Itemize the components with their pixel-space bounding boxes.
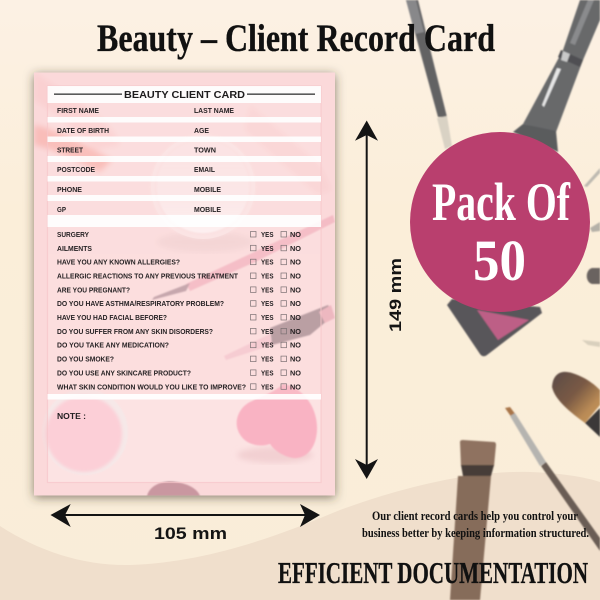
card photo: heart <box>237 384 317 463</box>
thin brush bottom <box>505 407 600 551</box>
yes and no labels: NO <box>290 313 301 322</box>
height label: 149 mm <box>386 258 405 332</box>
silver tools right <box>582 168 600 347</box>
personal details fields: MOBILE <box>194 185 221 194</box>
yes and no labels: NO <box>290 272 301 280</box>
yes and no labels: YES <box>261 230 274 239</box>
pack of 50 badge <box>410 132 590 312</box>
width arrow <box>50 504 320 527</box>
flat brush <box>450 440 496 600</box>
health questions <box>57 230 246 391</box>
personal details fields: DATE OF BIRTH <box>57 126 109 135</box>
card heading: BEAUTY CLIENT CARD <box>124 89 245 101</box>
personal details fields: TOWN <box>194 146 216 155</box>
card <box>34 72 335 496</box>
health questions: WHAT SKIN CONDITION WOULD YOU LIKE TO IMPROVE? <box>57 382 246 391</box>
compact <box>447 299 542 356</box>
note label: NOTE : <box>57 412 86 421</box>
thin brush top <box>406 0 452 149</box>
yes and no labels: YES <box>261 272 274 280</box>
health questions: HAVE YOU HAD FACIAL BEFORE? <box>57 313 167 322</box>
health questions: DO YOU SMOKE? <box>57 355 114 364</box>
yes and no labels: NO <box>290 382 301 391</box>
yes and no labels: YES <box>261 258 274 267</box>
health questions: ALLERGIC REACTIONS TO ANY PREVIOUS TREATMENT <box>57 272 238 280</box>
personal details fields: GP <box>57 205 66 214</box>
height arrow <box>355 120 378 479</box>
personal details fields: AGE <box>194 126 209 135</box>
yes and no labels: YES <box>261 327 274 336</box>
yes and no labels: YES <box>261 368 274 377</box>
yes and no labels: NO <box>290 341 301 350</box>
blush brush <box>552 372 600 437</box>
checkboxes <box>250 232 286 389</box>
bottom wave <box>0 472 600 600</box>
personal details fields: EMAIL <box>194 165 215 174</box>
card photo: pink brush <box>152 215 335 360</box>
yes and no labels: YES <box>261 313 274 322</box>
personal details fields: LAST NAME <box>194 106 234 115</box>
health questions: AILMENTS <box>57 244 92 253</box>
yes and no labels: YES <box>261 382 274 391</box>
personal details fields: STREET <box>57 146 83 155</box>
yes and no labels: YES <box>261 341 274 350</box>
card photo: glass dish <box>158 176 248 247</box>
large black brush <box>513 0 600 152</box>
yes and no labels: NO <box>290 258 301 267</box>
personal details fields <box>57 106 234 214</box>
yes and no labels: YES <box>261 355 274 364</box>
card photo: lipstick cap <box>147 482 200 496</box>
pack of 50 badge: 50 <box>473 228 526 293</box>
personal details fields: MOBILE <box>194 205 221 214</box>
yes and no labels: NO <box>290 355 301 364</box>
yes and no labels: YES <box>261 285 274 294</box>
yes and no labels: YES <box>261 299 274 308</box>
yes and no labels: NO <box>290 285 301 294</box>
health questions: DO YOU TAKE ANY MEDICATION? <box>57 341 169 350</box>
health questions: ARE YOU PREGNANT? <box>57 285 130 294</box>
yes and no labels: NO <box>290 299 301 308</box>
yes and no labels: NO <box>290 244 301 253</box>
yes and no labels: YES <box>261 244 274 253</box>
health questions: DO YOU SUFFER FROM ANY SKIN DISORDERS? <box>57 327 213 336</box>
health questions: HAVE YOU ANY KNOWN ALLERGIES? <box>57 258 180 267</box>
health questions: DO YOU HAVE ASTHMA/RESPIRATORY PROBLEM? <box>57 299 224 308</box>
pink rows <box>153 185 320 345</box>
yes and no labels <box>261 230 301 391</box>
card frame <box>34 72 335 496</box>
personal details fields: POSTCODE <box>57 165 95 174</box>
makeup props <box>406 0 600 600</box>
yes and no labels: NO <box>290 230 301 239</box>
health questions: SURGERY <box>57 230 89 239</box>
health questions: DO YOU USE ANY SKINCARE PRODUCT? <box>57 368 191 377</box>
personal details fields: PHONE <box>57 185 82 194</box>
yes and no labels: NO <box>290 368 301 377</box>
description <box>362 509 589 540</box>
white stripes <box>48 86 321 400</box>
width label: 105 mm <box>154 524 227 543</box>
card photo: macaron <box>48 400 122 472</box>
yes and no labels: NO <box>290 327 301 336</box>
title: Beauty – Client Record Card <box>97 17 495 60</box>
card photo: ribbon <box>34 81 116 173</box>
personal details fields: FIRST NAME <box>57 106 99 115</box>
